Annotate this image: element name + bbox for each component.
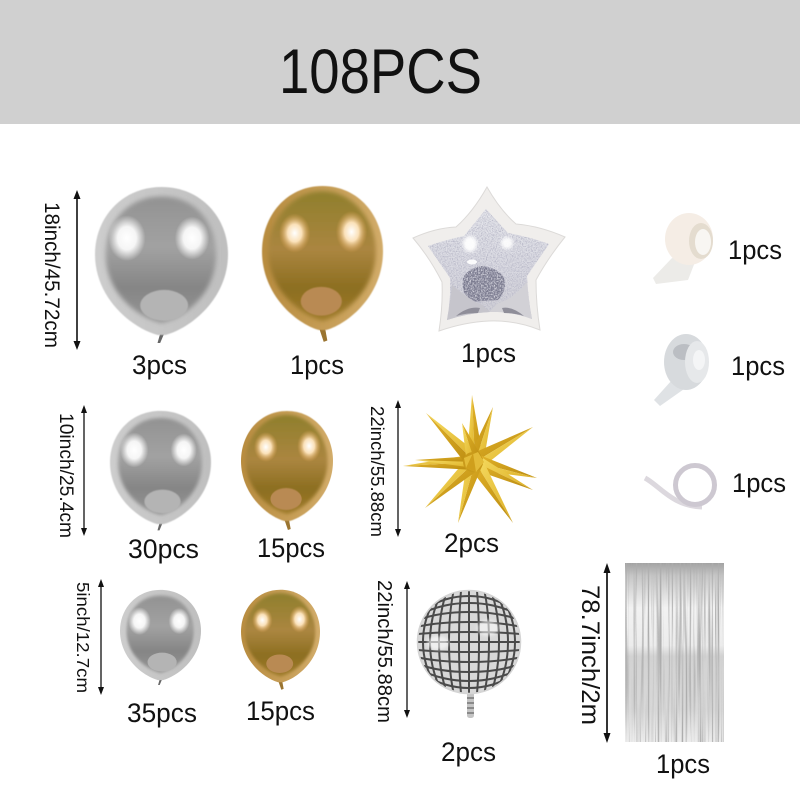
accessory: glue dot roll: [653, 213, 713, 284]
label: 15pcs: [257, 533, 325, 563]
silver tinsel curtain: [625, 563, 724, 742]
label: 30pcs: [128, 534, 199, 564]
gold balloon 10 inch: [241, 411, 333, 530]
size arrow: 5 inch row: [73, 579, 104, 695]
label: 1pcs: [290, 350, 344, 380]
size arrow: 5 inch row: 5inch/12.7cm: [73, 582, 93, 693]
size arrow: 22 inch disco ball: [373, 580, 410, 723]
accessory: clear dot strip roll: [654, 334, 709, 406]
size arrow: 18 inch row: [40, 190, 80, 350]
label: 3pcs: [132, 350, 187, 380]
label: 1pcs: [656, 749, 710, 779]
disco ball balloon: [416, 590, 522, 718]
label: 1pcs: [461, 338, 516, 368]
silver balloon 5 inch: [120, 590, 201, 685]
size arrow: 10 inch row: [55, 405, 87, 538]
size arrow: 18 inch row: 18inch/45.72cm: [40, 202, 63, 348]
size arrow: curtain: [576, 563, 610, 743]
size arrow: 22 inch disco ball: 22inch/55.88cm: [373, 580, 395, 723]
header banner: [0, 0, 800, 124]
label: 2pcs: [441, 737, 496, 767]
gold balloon 5 inch: [241, 590, 320, 690]
size arrow: 10 inch row: 10inch/25.4cm: [55, 413, 76, 538]
size arrow: 22 inch starburst: [367, 400, 401, 537]
title: 108PCS: [279, 37, 482, 107]
accessory: ribbon coil: [645, 466, 714, 507]
label: 1pcs: [731, 351, 785, 381]
gold starburst balloon: [403, 395, 537, 523]
label: 1pcs: [732, 468, 786, 498]
gold balloon 18 inch: [262, 186, 383, 342]
silver balloon 18 inch: [95, 187, 228, 343]
label: 1pcs: [728, 235, 782, 265]
label: 15pcs: [246, 696, 315, 726]
size arrow: 22 inch starburst: 22inch/55.88cm: [367, 406, 387, 537]
holographic star balloon: [413, 187, 565, 331]
size arrow: curtain: 78.7inch/2m: [576, 585, 604, 725]
silver balloon 10 inch: [110, 411, 211, 530]
label: 2pcs: [444, 528, 499, 558]
label: 35pcs: [127, 698, 197, 728]
